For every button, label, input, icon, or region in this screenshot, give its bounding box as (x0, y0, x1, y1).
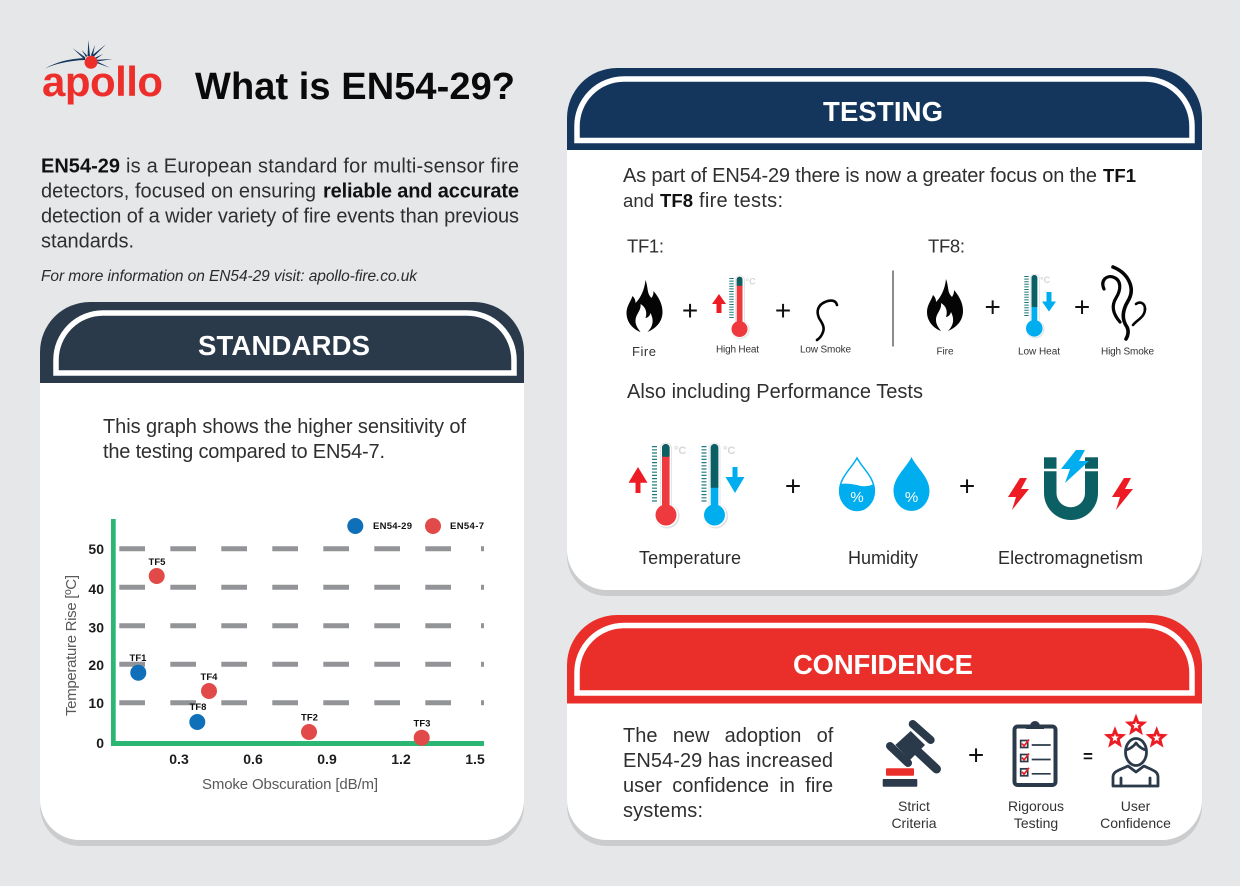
x axis labels (169, 751, 485, 767)
x axis labels: 0.9 (317, 751, 337, 767)
logo: apollo: apollo (42, 58, 163, 105)
strict criteria label: Criteria (891, 815, 937, 831)
low smoke label: Low Smoke (800, 345, 851, 356)
icon: high smoke (1103, 267, 1145, 339)
user confidence label: Confidence (1100, 815, 1171, 831)
icon: temperature down (702, 443, 744, 528)
standards description: the testing compared to EN54-7. (103, 441, 385, 463)
electromagnetism label: Electromagnetism (998, 548, 1143, 568)
icon: high heat thermometer: °C (746, 276, 756, 286)
icon: humidity drops: % (905, 489, 918, 506)
low heat label: Low Heat (1018, 346, 1060, 358)
y axis labels: 20 (88, 657, 104, 673)
strict criteria label: Strict (898, 798, 930, 814)
data points: TF2 (301, 713, 318, 724)
y axis labels: 30 (88, 620, 104, 636)
divider (892, 270, 894, 346)
group: TF8 test (927, 236, 1154, 358)
icon: high heat thermometer (712, 276, 756, 339)
panel: standards (40, 302, 524, 846)
confidence description: EN54-29 has increased (623, 750, 833, 772)
heading: testing: TESTING (823, 96, 943, 127)
icon: magnet with lightning (1008, 450, 1133, 520)
confidence description: systems: (623, 800, 703, 822)
icon: clipboard checklist (1014, 721, 1056, 785)
data points: TF1 (130, 653, 147, 664)
legend: EN54-7 (450, 521, 484, 532)
testing introduction: TF1 (1103, 165, 1136, 186)
plus: + (968, 740, 984, 770)
icon: temperature up: °C (674, 445, 686, 457)
plus: + (785, 470, 801, 502)
icon: user with stars (1108, 718, 1164, 786)
y axis labels: 50 (88, 541, 104, 557)
data points: TF3 (414, 719, 430, 730)
x axis labels: 0.3 (169, 751, 189, 767)
standards description: This graph shows the higher sensitivity of (103, 416, 466, 438)
TF8 heading: TF8: (928, 236, 965, 257)
y axis labels: 10 (88, 695, 104, 711)
icon: low heat thermometer: °C (1040, 275, 1051, 285)
x axis labels: 1.5 (465, 751, 485, 767)
intro text block (41, 156, 519, 252)
data points: TF5 (149, 557, 166, 568)
plus: + (1074, 292, 1090, 322)
group: TF1 test (626, 236, 851, 359)
plus: + (775, 295, 791, 326)
testing introduction (623, 165, 1136, 212)
confidence description: user confidence in fire (623, 775, 833, 797)
heading: confidence: CONFIDENCE (793, 649, 973, 680)
rigorous testing label: Testing (1014, 815, 1058, 831)
user confidence label: User (1121, 798, 1151, 814)
intro text block: is a European standard for multi-sensor fire (126, 156, 519, 178)
heading: standards: STANDARDS (198, 330, 370, 361)
high smoke label: High Smoke (1101, 346, 1154, 358)
y axis labels: 0 (96, 735, 104, 751)
intro text block: standards. (41, 230, 134, 252)
title: What is EN54-29? (195, 66, 515, 108)
high heat label: High Heat (716, 345, 759, 356)
plus: + (959, 470, 975, 502)
TF1 heading: TF1: (627, 236, 664, 257)
intro text block: EN54-29 (41, 156, 120, 178)
icon: humidity drops: % (850, 489, 864, 506)
fire label: Fire (936, 346, 954, 358)
performance tests heading: Also including Performance Tests (627, 381, 923, 403)
more information link text: For more information on EN54-29 visit: apollo-fire.co.uk (41, 268, 418, 285)
data points: TF4 (201, 672, 218, 683)
testing introduction: As part of EN54-29 there is now a greater focus on the (623, 165, 1097, 187)
standards description (103, 416, 466, 463)
testing introduction: and (623, 190, 654, 211)
y axis labels: 40 (88, 581, 104, 597)
rigorous testing label (1008, 798, 1064, 831)
icon: gavel (883, 724, 936, 787)
legend (347, 518, 484, 534)
humidity label: Humidity (848, 548, 918, 568)
data points (130, 557, 430, 746)
intro text block: detection of a wider variety of fire events than previous (41, 206, 519, 228)
strict criteria label (891, 798, 937, 831)
temperature label: Temperature (639, 548, 741, 568)
user confidence label (1100, 798, 1171, 831)
testing introduction: TF8 (660, 190, 693, 211)
fire label: Fire (632, 344, 656, 359)
icon: low heat thermometer (1025, 274, 1056, 338)
x axis labels: 1.2 (391, 751, 411, 767)
plus: + (682, 295, 698, 326)
testing introduction: fire tests: (699, 190, 783, 212)
icon: fire (626, 280, 662, 332)
intro text block: detectors, focused on ensuring (41, 180, 316, 202)
panel: testing (567, 68, 1202, 846)
icon: low smoke (817, 301, 837, 340)
intro text block: reliable and accurate (323, 180, 519, 202)
plus: + (985, 292, 1001, 322)
x axis title: Smoke Obscuration [dB/m] (202, 776, 378, 793)
data points: TF8 (190, 702, 206, 713)
icon: humidity drops (839, 457, 930, 511)
x axis labels: 0.6 (243, 751, 263, 767)
y axis labels (88, 541, 104, 751)
legend: EN54-29 (373, 521, 412, 532)
equals: = (1083, 747, 1093, 766)
icon: temperature down: °C (723, 445, 735, 457)
y axis title: Temperature Rise [ºC] (63, 575, 80, 716)
icon: fire (927, 279, 963, 331)
confidence description (623, 725, 834, 822)
rigorous testing label: Rigorous (1008, 798, 1064, 814)
scatter chart (63, 518, 485, 793)
icon: temperature up (628, 443, 686, 528)
confidence description: The new adoption of (623, 725, 834, 747)
panel: confidence (567, 615, 1202, 846)
